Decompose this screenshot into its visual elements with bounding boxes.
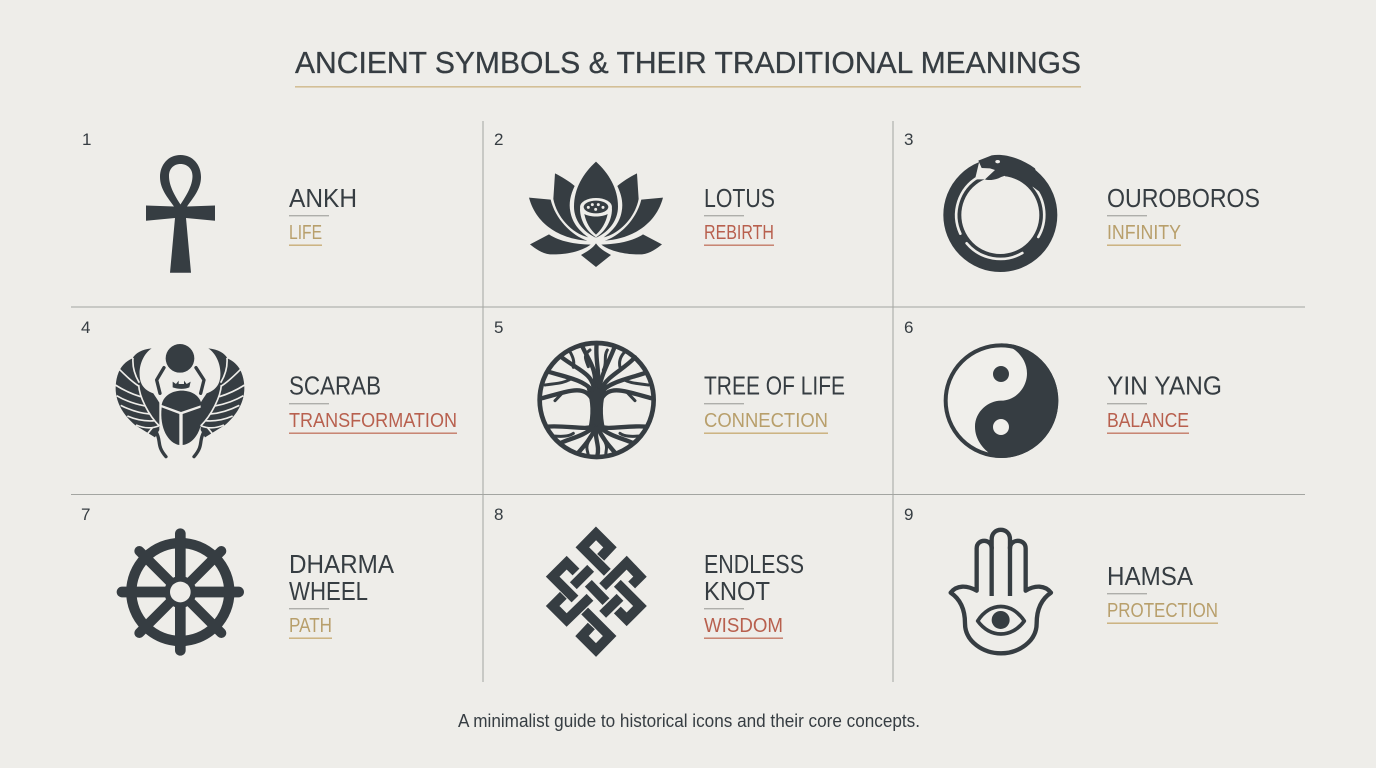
panel: yin yang: YIN YANG (1107, 370, 1222, 400)
icon: ankh (146, 155, 215, 273)
panel: ankh: 1 (82, 130, 91, 149)
icon: dharma wheel (122, 534, 239, 650)
icon: tree of life (540, 343, 654, 457)
panel: hamsa: PROTECTION (1107, 600, 1218, 622)
icon: scarab (115, 344, 245, 457)
panel: endless knot: KNOT (704, 576, 770, 606)
right wing (201, 348, 245, 437)
panel: lotus: REBIRTH (704, 222, 774, 244)
panel: ouroboros (904, 130, 1260, 263)
panel: endless knot: ENDLESS (704, 549, 804, 579)
panel: dharma wheel: WHEEL (289, 576, 368, 606)
panel: yin yang (904, 318, 1222, 458)
panel: scarab: 4 (81, 318, 90, 337)
panel: ouroboros: INFINITY (1107, 222, 1181, 244)
title: ANCIENT SYMBOLS & THEIR TRADITIONAL MEANINGS (295, 45, 1081, 80)
left wing (115, 348, 159, 437)
panel: scarab (81, 318, 457, 457)
panel: scarab: TRANSFORMATION (289, 410, 457, 432)
footer caption: A minimalist guide to historical icons and their core concepts. (458, 711, 920, 731)
panel: endless knot: WISDOM (704, 615, 783, 637)
panel: hamsa: HAMSA (1107, 561, 1194, 591)
panel: tree of life (494, 318, 845, 457)
panel: lotus: 2 (494, 130, 503, 149)
panel: tree of life: 5 (494, 318, 503, 337)
icon: hamsa (951, 530, 1051, 653)
panel: ouroboros: OUROBOROS (1107, 183, 1260, 213)
panel: dharma wheel: DHARMA (289, 549, 395, 579)
panel: ankh: ANKH (289, 183, 357, 213)
icon: endless knot (553, 533, 640, 650)
panel: endless knot (494, 505, 804, 650)
panel: dharma wheel: 7 (81, 505, 90, 524)
panel: yin yang: BALANCE (1107, 410, 1189, 432)
panel: tree of life: TREE OF LIFE (704, 370, 845, 400)
panel: hamsa (904, 505, 1218, 653)
panel: ankh: LIFE (289, 222, 322, 244)
panel: lotus (494, 130, 775, 267)
panel: ankh (82, 130, 357, 273)
panel: scarab: SCARAB (289, 370, 381, 400)
panel: yin yang: 6 (904, 318, 913, 337)
panel: endless knot: 8 (494, 505, 503, 524)
icon: lotus (529, 162, 663, 267)
panel: dharma wheel: PATH (289, 615, 332, 637)
panel: lotus: LOTUS (704, 183, 775, 213)
icon: yin yang (946, 343, 1058, 458)
panel: ouroboros: 3 (904, 130, 913, 149)
panel: hamsa: 9 (904, 505, 913, 524)
panel: tree of life: CONNECTION (704, 410, 828, 432)
panel: dharma wheel (81, 505, 395, 650)
icon: ouroboros (952, 152, 1048, 263)
